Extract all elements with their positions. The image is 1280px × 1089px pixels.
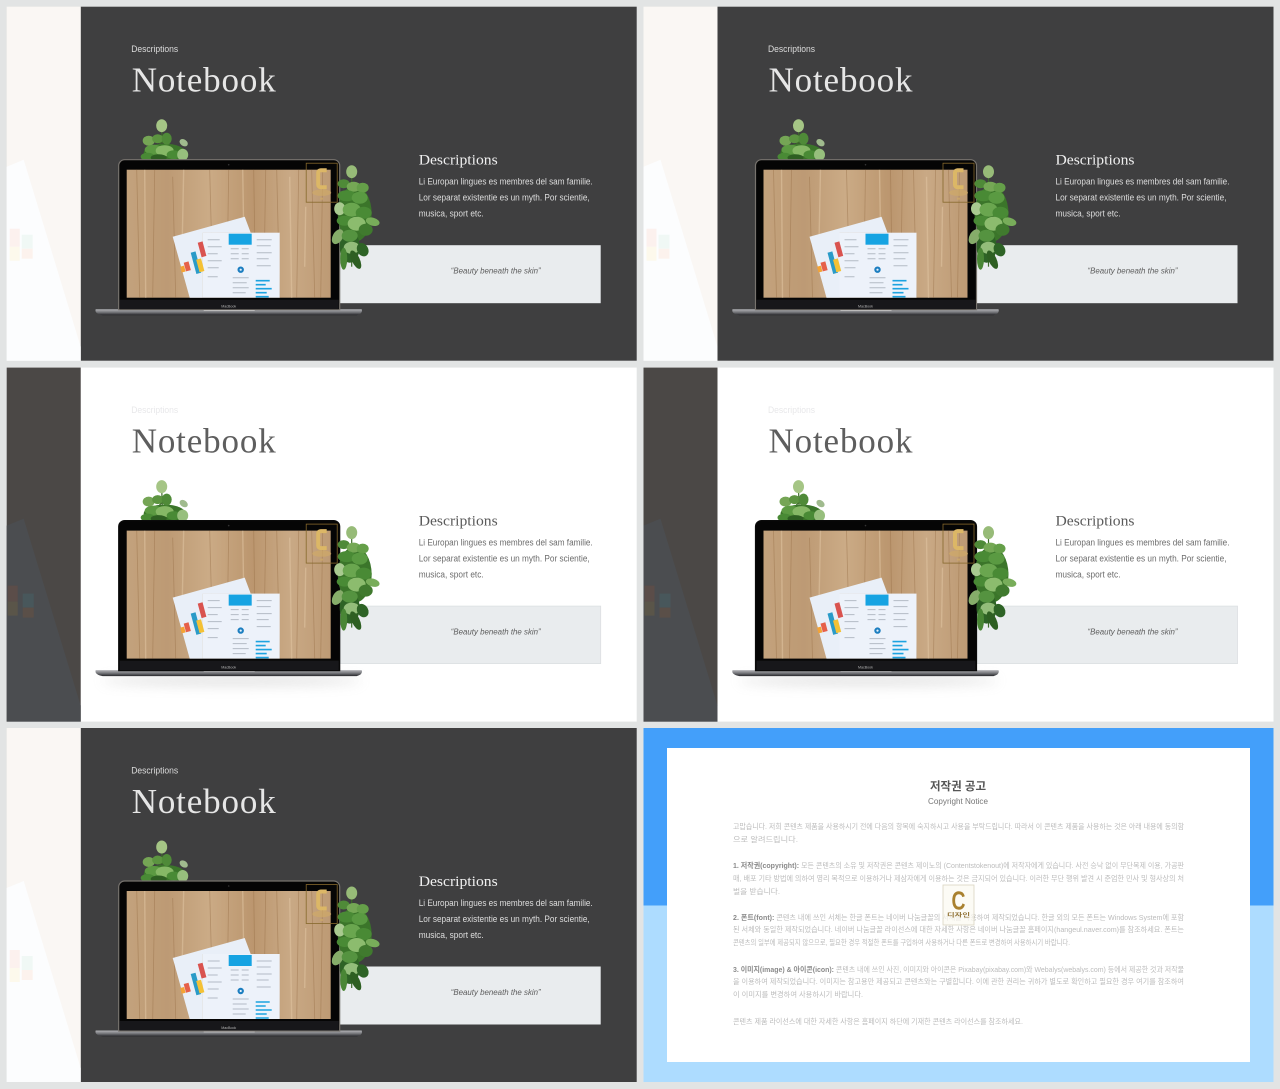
panel: slide 4, light bbox=[644, 368, 1274, 722]
blue upper background bbox=[644, 728, 1274, 906]
description text bbox=[1056, 153, 1230, 219]
plant beside laptop bbox=[966, 526, 1017, 631]
section 3: image and icon: 이 이미지를 변경하여 사용하시기 바랍니다. bbox=[733, 989, 863, 999]
quote box: “Beauty beneath the skin” bbox=[451, 627, 542, 637]
laptop bbox=[95, 160, 362, 315]
panel: slide 3, light bbox=[7, 368, 637, 722]
gold watermark bbox=[306, 884, 337, 924]
white slide background bbox=[81, 368, 637, 722]
title: Notebook bbox=[132, 61, 276, 100]
description text: Descriptions bbox=[419, 874, 498, 890]
panel: copyright notice slide bbox=[644, 728, 1274, 1082]
laptop bbox=[95, 521, 362, 676]
plant beside laptop bbox=[329, 165, 380, 270]
eyebrow label: Descriptions bbox=[768, 405, 815, 415]
plant behind laptop bbox=[141, 480, 189, 523]
eyebrow label: Descriptions bbox=[131, 766, 179, 776]
description text: musica, sport etc. bbox=[419, 930, 484, 940]
panel: slide 5, dark bbox=[7, 728, 637, 1082]
gold C watermark: C bbox=[952, 886, 966, 916]
laptop bbox=[95, 881, 362, 1036]
title: Notebook bbox=[768, 422, 913, 461]
laptop bbox=[732, 521, 999, 676]
plant behind laptop bbox=[141, 119, 189, 162]
laptop brand: MacBook bbox=[858, 305, 873, 309]
title: Notebook bbox=[768, 61, 913, 100]
section 1: copyright bbox=[733, 860, 1184, 896]
description text bbox=[419, 514, 593, 580]
panel: slide 1, dark bbox=[7, 7, 637, 361]
description text: musica, sport etc. bbox=[419, 209, 484, 219]
laptop shadow bbox=[738, 676, 998, 686]
description text: Lor separat existentie es un myth. Por scientie, bbox=[1056, 193, 1226, 203]
description text: Lor separat existentie es un myth. Por scientie, bbox=[1056, 554, 1226, 564]
title: Notebook bbox=[132, 782, 276, 821]
plant behind laptop bbox=[778, 480, 826, 523]
notice heading: 저작권 공고 bbox=[930, 779, 986, 793]
plant behind laptop bbox=[141, 840, 189, 883]
gold C watermark: 디자인 bbox=[947, 911, 970, 919]
description text: Li Europan lingues es membres del sam familie. bbox=[419, 898, 593, 908]
intro paragraph: 으로 알려드립니다. bbox=[733, 834, 798, 844]
laptop brand: MacBook bbox=[858, 666, 873, 670]
section 3: image and icon bbox=[733, 964, 1184, 999]
description text: Li Europan lingues es membres del sam familie. bbox=[419, 177, 593, 187]
section 3: image and icon: 을 이용하여 제작되었습니다. 이미지는 참고용만 제공되고 콘텐츠와는 구별합니다. 이에 관한 권리는 귀하가 별도로 확인하고 필요한 경우 여기를 참조하여 bbox=[733, 976, 1184, 986]
gold watermark bbox=[943, 163, 974, 202]
description text: musica, sport etc. bbox=[1056, 570, 1120, 580]
dark slide background bbox=[718, 7, 1274, 361]
description text: Descriptions bbox=[1056, 514, 1135, 530]
section 2: font: 된 서체와 동일한 제작되었습니다. 네이버 나눔글꼴 라이선스에 대한 자세한 사항은 네이버 나눔글꼴 홈페이지(hangeul.naver.com)를 참조하세요. 폰트는 bbox=[733, 924, 1184, 934]
plant beside laptop bbox=[329, 886, 380, 992]
quote box bbox=[340, 966, 601, 1024]
description text: Li Europan lingues es membres del sam familie. bbox=[1056, 177, 1230, 187]
description text: Lor separat existentie es un myth. Por scientie, bbox=[419, 193, 590, 203]
left photo strip bbox=[644, 7, 718, 361]
closing line: 콘텐츠 제품 라이선스에 대한 자세한 사항은 홈페이지 하단에 기재한 콘텐츠 라이선스를 참조하세요. bbox=[733, 1016, 1023, 1026]
description text: musica, sport etc. bbox=[1056, 209, 1120, 219]
eyebrow label: Descriptions bbox=[768, 44, 815, 54]
section 2: font: 2. 폰트(font): 콘텐츠 내에 쓰인 서체는 한글 폰트는 네이버 나눔글꼴의 서체를 사용하여 제작되었습니다. 한글 외의 모든 폰트는 Windows System에 포함 bbox=[733, 912, 1184, 922]
laptop brand: MacBook bbox=[221, 666, 236, 670]
plant beside laptop bbox=[966, 165, 1017, 270]
section 3: image and icon: 3. 이미지(image) & 아이콘(icon): 콘텐츠 내에 쓰인 사진, 이미지와 아이콘은 Pixabay(pixabay.com)와 Webalys(webalys.com) 등에서 제공한 것과 저작물 bbox=[733, 964, 1184, 974]
quote box: “Beauty beneath the skin” bbox=[1088, 627, 1179, 637]
quote box: “Beauty beneath the skin” bbox=[451, 266, 542, 276]
quote box bbox=[977, 606, 1238, 664]
description text: Descriptions bbox=[1056, 153, 1135, 169]
left photo strip bbox=[7, 368, 81, 722]
left photo strip bbox=[644, 368, 718, 722]
description text: Li Europan lingues es membres del sam familie. bbox=[419, 538, 593, 548]
intro paragraph: 고맙습니다. 저희 콘텐츠 제품을 사용하시기 전에 다음의 항목에 숙지하시고 사용을 부탁드립니다. 따라서 이 콘텐츠 제품을 사용하는 것은 아래 내용에 동의함 bbox=[733, 821, 1184, 831]
left photo strip bbox=[7, 728, 81, 1082]
description text bbox=[419, 874, 593, 940]
description text bbox=[1056, 514, 1230, 580]
white slide background bbox=[718, 368, 1274, 722]
dark slide background bbox=[81, 7, 637, 361]
title: Notebook bbox=[132, 422, 276, 461]
panel: slide 2, dark bbox=[644, 7, 1274, 361]
gold watermark bbox=[306, 163, 337, 202]
eyebrow label: Descriptions bbox=[131, 405, 179, 415]
laptop brand: MacBook bbox=[221, 305, 236, 309]
quote box: “Beauty beneath the skin” bbox=[1088, 266, 1179, 276]
intro paragraph bbox=[733, 821, 1184, 844]
description text: Li Europan lingues es membres del sam familie. bbox=[1056, 538, 1230, 548]
gold watermark bbox=[943, 524, 974, 563]
light blue lower background bbox=[644, 906, 1274, 1082]
section 1: copyright: 1. 저작권(copyright): 모든 콘텐츠의 소유 및 저작권은 콘텐츠 제이노의 (Contentstokenout)에 저작자에게 있습니다. 사전 승낙 없이 무단복제 이용, 가공판 bbox=[733, 860, 1184, 870]
laptop brand: MacBook bbox=[221, 1026, 236, 1030]
quote box bbox=[340, 245, 601, 303]
quote box: “Beauty beneath the skin” bbox=[451, 987, 542, 997]
eyebrow label: Descriptions bbox=[131, 44, 179, 54]
description text: musica, sport etc. bbox=[419, 570, 484, 580]
description text: Lor separat existentie es un myth. Por scientie, bbox=[419, 914, 590, 924]
left photo strip bbox=[7, 7, 81, 361]
laptop bbox=[732, 160, 999, 315]
gold C watermark bbox=[943, 885, 974, 925]
description text: Descriptions bbox=[419, 153, 498, 169]
plant behind laptop bbox=[778, 119, 826, 162]
section 1: copyright: 매, 배포 기타 방법에 의하여 영리 목적으로 이용하거나 제삼자에게 이용하는 것은 금지되어 있습니다. 이러한 무단 행위 발견 시 준엄한 민사 및 형사상의 처 bbox=[733, 873, 1184, 883]
laptop shadow bbox=[102, 676, 362, 686]
section 2: font bbox=[733, 912, 1184, 947]
section 1: copyright: 벌을 받습니다. bbox=[733, 886, 780, 896]
quote box bbox=[340, 606, 601, 664]
plant beside laptop bbox=[329, 526, 380, 631]
description text: Lor separat existentie es un myth. Por scientie, bbox=[419, 554, 590, 564]
white notice card bbox=[667, 748, 1250, 1062]
notice subheading: Copyright Notice bbox=[928, 796, 988, 806]
gold watermark bbox=[306, 524, 337, 563]
section 2: font: 콘텐츠의 일부에 제공되지 않으므로, 필요한 경우 적절한 폰트를 구입하여 사용하거나 다른 폰트로 변경하여 사용하시기 바랍니다. bbox=[733, 937, 1070, 947]
description text bbox=[419, 153, 593, 219]
description text: Descriptions bbox=[419, 514, 498, 530]
dark slide background bbox=[81, 728, 637, 1082]
quote box bbox=[976, 245, 1238, 303]
